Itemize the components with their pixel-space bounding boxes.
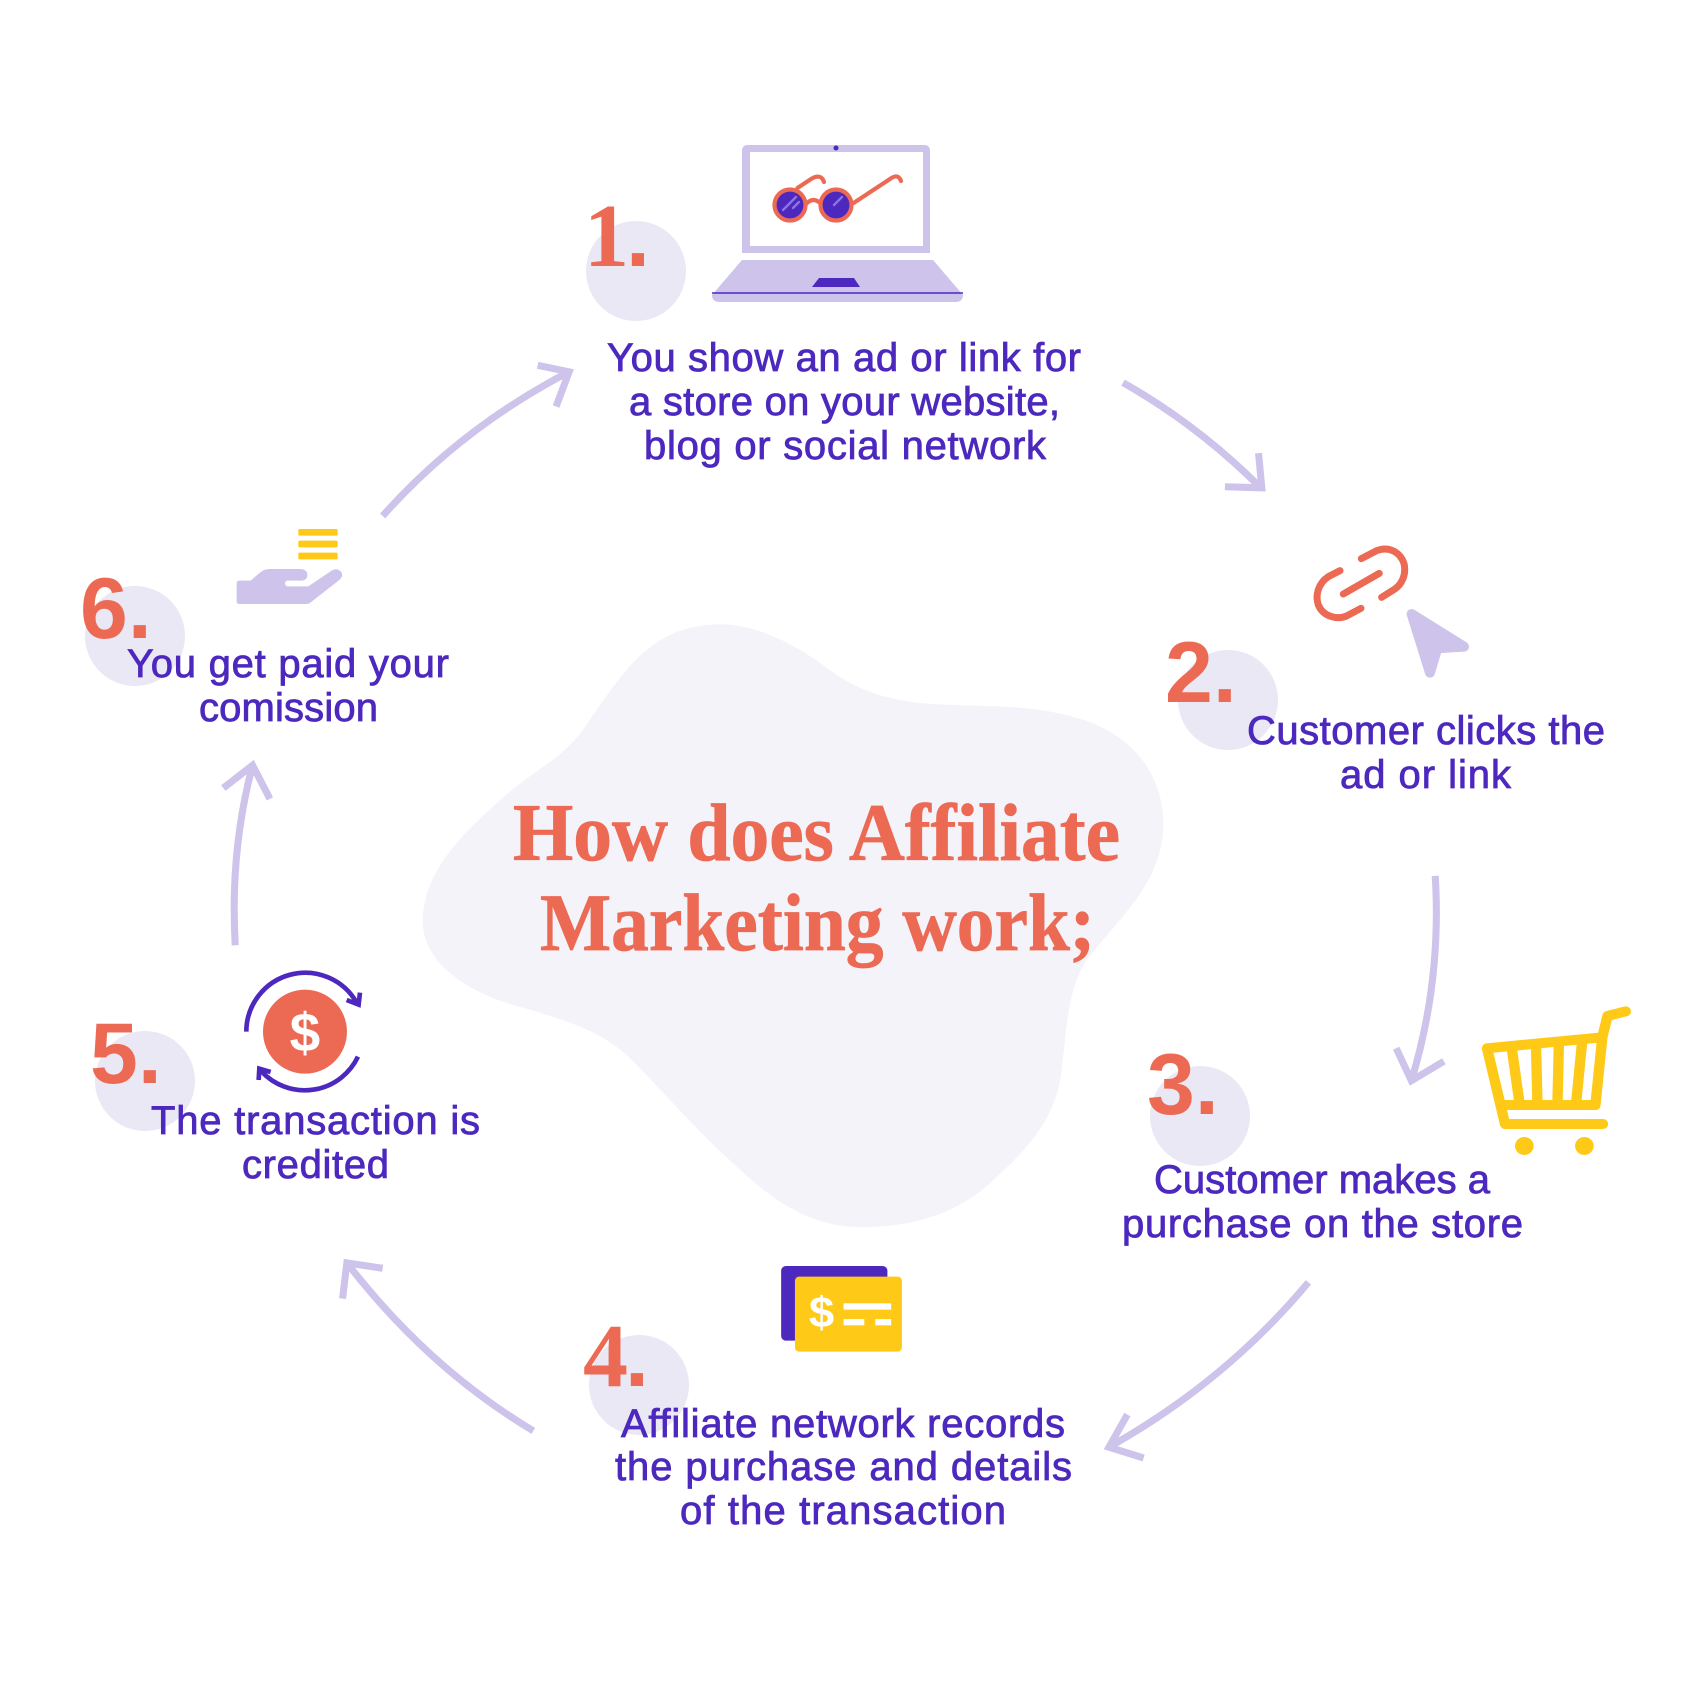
- step 2 text: Customer clicks the: [1247, 709, 1605, 753]
- arrow: step 3 to step 4: [1109, 1282, 1308, 1458]
- icon: link and cursor: [1317, 549, 1464, 673]
- step 4 text: [615, 1402, 1072, 1533]
- step 6 text: You get paid your: [127, 642, 449, 686]
- step 3: [1122, 1011, 1626, 1246]
- step 5 circle: [95, 1031, 195, 1131]
- icon: payment cards: [781, 1266, 902, 1352]
- step 3 text: [1122, 1158, 1523, 1246]
- step 5 text: [151, 1099, 480, 1187]
- step 3 text: purchase on the store: [1122, 1202, 1523, 1246]
- step 6 text: [127, 642, 449, 730]
- icon: dollar coin with cycle arrows: [246, 973, 360, 1090]
- step 2 number: 2.: [1165, 625, 1237, 721]
- step 4 text: the purchase and details: [615, 1445, 1072, 1489]
- step 3 number: 3.: [1147, 1037, 1219, 1133]
- step 2 text: ad or link: [1340, 753, 1512, 797]
- step 1 number: 1.: [584, 187, 650, 286]
- icon: shopping cart: [1487, 1011, 1626, 1155]
- step 5 text: credited: [242, 1143, 389, 1187]
- step 5 number: 5.: [90, 1006, 162, 1102]
- title: [513, 787, 1120, 968]
- step 1 text: [607, 336, 1081, 468]
- step 4 circle: [589, 1335, 689, 1435]
- arrow: step 5 to step 6: [223, 765, 270, 945]
- step 2: [1165, 549, 1605, 797]
- arrow: step 2 to step 3: [1396, 876, 1444, 1081]
- cycle arrows: [223, 365, 1444, 1458]
- arrow: step 6 to step 1: [383, 365, 569, 516]
- step 1 text: You show an ad or link for: [607, 336, 1081, 380]
- step 4 number: 4.: [583, 1307, 649, 1406]
- icon: hand with coins: [237, 529, 342, 604]
- step 6: [80, 529, 449, 730]
- arrow: step 1 to step 2: [1123, 383, 1262, 488]
- step 5: [90, 973, 480, 1187]
- step 1 circle: [586, 221, 686, 321]
- step 2 text: [1247, 709, 1605, 797]
- title: How does Affiliate: [513, 787, 1120, 878]
- icon: payment cards: $: [809, 1288, 834, 1337]
- step 6 number: 6.: [80, 561, 152, 657]
- icon: dollar coin with cycle arrows: $: [290, 1001, 320, 1063]
- step 3 text: Customer makes a: [1154, 1158, 1491, 1202]
- step 6 circle: [85, 586, 185, 686]
- step 1 text: blog or social network: [644, 424, 1047, 468]
- icon: laptop with glasses: [712, 145, 963, 302]
- step 1 text: a store on your website,: [629, 380, 1060, 424]
- central blob background: [423, 624, 1163, 1227]
- step 4: [583, 1266, 1072, 1533]
- step 2 circle: [1178, 650, 1278, 750]
- step 5 text: The transaction is: [151, 1099, 480, 1143]
- step 4 text: Affiliate network records: [621, 1402, 1065, 1446]
- title: Marketing work;: [540, 877, 1095, 968]
- step 3 circle: [1150, 1066, 1250, 1166]
- arrow: step 4 to step 5: [343, 1263, 533, 1431]
- step 4 text: of the transaction: [680, 1489, 1006, 1533]
- step 1: [584, 145, 1081, 468]
- step 6 text: comission: [199, 686, 378, 730]
